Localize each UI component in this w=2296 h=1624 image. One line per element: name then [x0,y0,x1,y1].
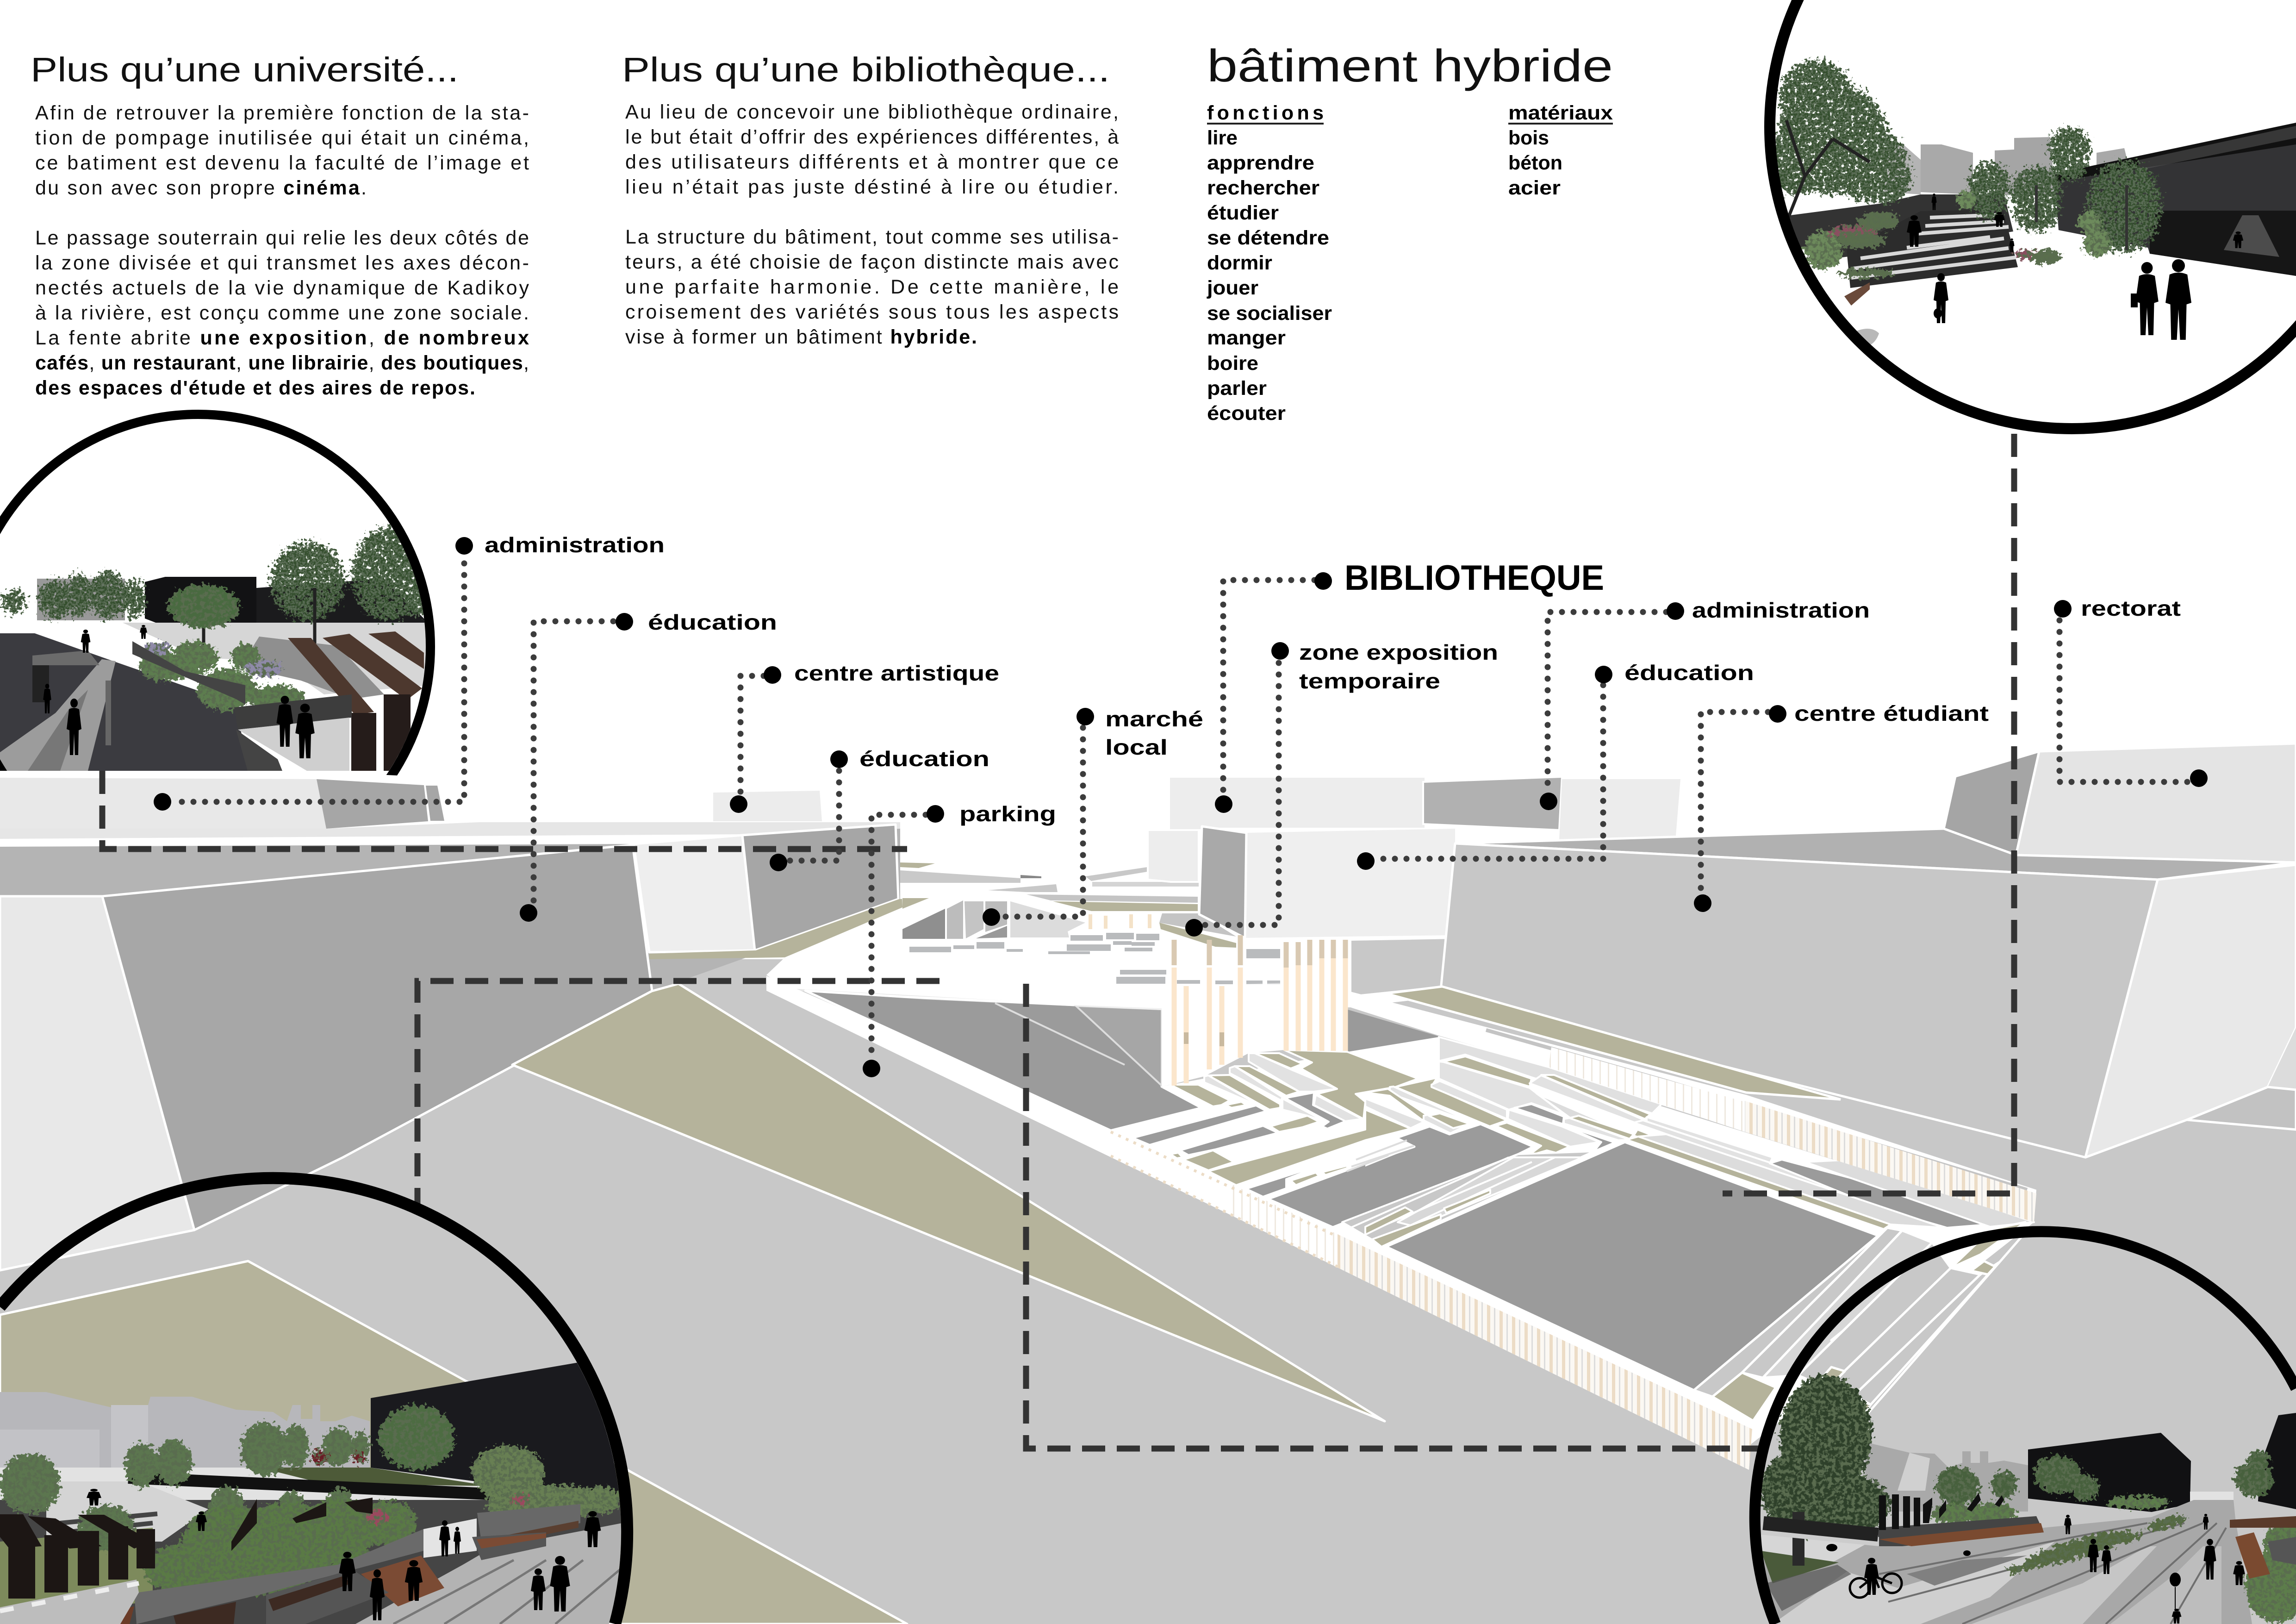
wood roof slats [288,631,424,771]
left big block [0,845,652,1270]
black building [145,577,430,628]
text block: bibliothèque: teurs, a été choisie de façon distincte mais avec [625,251,1119,273]
ring [0,1178,627,1624]
callout: éducation middle [770,747,989,871]
dashed frame: bottom left render [417,981,940,1208]
callout: éducation left [520,610,777,922]
heading: plus qu'une université: Plus qu’une université... [31,50,459,89]
text block: bibliothèque: vise à former un bâtiment hybride. [625,326,977,348]
terraces [1133,1037,2034,1229]
site model [0,743,2296,1624]
library plaza left [805,991,1201,1131]
list: fonctions: jouer [1207,277,1258,299]
back left buildings [0,771,900,847]
text block: bibliothèque: croisement des variétés sous tous les aspects [625,301,1119,323]
dashed frame: bottom right render [1026,984,1759,1449]
callout: administration right [1540,598,1870,810]
people [43,625,315,758]
text block: université: tion de pompage inutilisée qui était un cinéma, [35,127,529,149]
ground [0,959,2296,1624]
text block: université: cafés, un restaurant, une librairie, des boutiques, [35,352,529,374]
text block: bibliothèque: des utilisateurs différents et à montrer que ce [625,151,1119,173]
vignette: top right render [1766,0,2296,429]
text block: université: Le passage souterrain qui relie les deux côtés de [35,227,529,249]
text block: université: nectés actuels de la vie dynamique de Kadikoy [35,277,529,299]
trees [1766,60,2161,252]
text block: université: ce batiment est devenu la faculté de l’image et [35,152,529,174]
callout: marché local: local [1105,735,1168,759]
list: fonctions: parler [1207,377,1267,400]
people [1826,1514,2245,1624]
callout: bibliothèque [1215,558,1604,813]
text block: bibliothèque: lieu n’était pas juste déstiné à lire ou étudier. [625,176,1119,198]
list: fonctions: dormir [1207,252,1272,274]
text block: bibliothèque: Au lieu de concevoir une bibliothèque ordinaire, [625,101,1119,123]
skyline [1865,1442,2028,1512]
list: matériaux: béton [1508,152,1562,174]
ring [1755,1231,2296,1624]
main courtyard [1386,1142,1878,1390]
callout: rectorat: rectorat [2081,596,2181,620]
heading: plus qu'une bibliothèque: Plus qu’une bibliothèque... [622,50,1110,89]
concrete planters and benches [46,1504,625,1624]
white bridge [766,954,1348,1010]
dashed frame: top right render [1723,434,2014,1193]
black pergola bars [1879,1493,2004,1530]
list: fonctions: rechercher [1207,177,1319,199]
olive triangle [512,984,1385,1421]
callout: marché local: marché [1105,707,1203,731]
list: matériaux [1508,102,1613,199]
callout: administration left [154,533,665,811]
list: fonctions [1207,102,1332,425]
callout: parking: parking [959,802,1056,826]
list: fonctions: se détendre [1207,227,1329,249]
ring [1770,0,2296,429]
far right building [1944,743,2296,862]
callout: administration right: administration [1692,598,1870,622]
vignette: bottom left render [0,1178,648,1624]
people [1907,194,2191,340]
list: fonctions: manger [1207,327,1286,349]
library tower [1162,935,1348,1087]
list: fonctions: écouter [1207,402,1286,425]
list: fonctions: boire [1207,352,1258,375]
text block: université: Afin de retrouver la première fonction de la sta- [35,102,529,124]
text block: université: à la rivière, est conçu comme une zone sociale. [35,302,529,324]
black buildings [2028,1413,2296,1512]
text block: université: du son avec son propre cinéma. [35,177,367,199]
callout: zone exposition temporaire [1185,640,1498,937]
callout: éducation right [1357,661,1754,870]
wood benches [2230,1516,2296,1579]
small stair and planters [1246,1138,1414,1197]
cyclist [1850,1574,1902,1598]
black arches [0,1498,373,1599]
middle plaza [1268,1124,1533,1227]
list: fonctions: se socialiser [1207,302,1332,325]
people [87,1489,601,1620]
callout: centre étudiant [1694,701,1989,912]
lower terraces [1694,1222,2025,1421]
left rail [766,976,1752,1470]
callout: éducation left: éducation [648,610,777,634]
central white zone [766,853,1455,1009]
callout: zone exposition temporaire: zone exposition [1299,640,1498,664]
list: fonctions: fonctions [1207,102,1324,124]
center back buildings [1148,777,1680,995]
callout: marché local [983,707,1203,926]
trees [2,528,440,620]
callout: rectorat [2054,596,2208,787]
text block: bibliothèque: le but était d’offrir des expériences différentes, à [625,126,1119,148]
callout: zone exposition temporaire: temporaire [1299,669,1440,693]
olive ground [0,1261,907,1624]
callout: centre étudiant: centre étudiant [1794,701,1989,725]
heading: bâtiment hybride: bâtiment hybride [1207,40,1613,91]
education block [634,824,931,959]
paving [1759,1500,2252,1624]
callout: centre artistique [730,661,999,813]
trees and planting [1930,1450,2296,1623]
dashed frame: left render [102,771,907,849]
text block: bibliothèque: La structure du bâtiment, tout comme ses utilisa- [625,226,1119,248]
dark wall with rail [2055,123,2296,276]
callout: centre artistique: centre artistique [794,661,999,685]
text block: université: des espaces d'étude et des aires de repos. [35,377,475,399]
callout: éducation middle: éducation [859,747,989,771]
courtyard terrace base [1111,1037,2034,1449]
text block: université: la zone divisée et qui transmet les axes décon- [35,252,529,274]
text block: bibliothèque: une parfaite harmonie. De cette manière, le [625,276,1119,298]
city skyline [0,1392,370,1481]
grass under arches [0,1528,153,1616]
list: fonctions: apprendre [1207,152,1314,174]
vignette: top left render [0,410,435,776]
ring [0,414,430,879]
list: fonctions: lire [1207,127,1238,149]
callout: administration left: administration [485,533,665,557]
right rail [1350,987,2036,1222]
student center block [1440,829,2296,1157]
text block: bibliothèque [625,101,1119,348]
callout: éducation right: éducation [1624,661,1754,685]
vignette: bottom right render [1755,1231,2296,1624]
text block: université [35,102,529,399]
callout: bibliothèque: BIBLIOTHEQUE [1344,558,1604,598]
list: matériaux: bois [1508,127,1549,149]
concrete bench [1761,1516,2044,1546]
trees [0,1405,620,1595]
list: fonctions: étudier [1207,202,1279,224]
market and roofs behind the bridge [900,862,1280,984]
list: matériaux: acier [1508,177,1561,199]
black wall [371,1362,648,1505]
walkways [0,650,116,771]
text block: université: La fente abrite une exposition, de nombreux [35,327,529,349]
strip between plazas [1342,1151,1594,1247]
list: matériaux: matériaux [1508,102,1613,124]
lower terrace [234,694,352,771]
callout: parking [863,802,1056,1077]
